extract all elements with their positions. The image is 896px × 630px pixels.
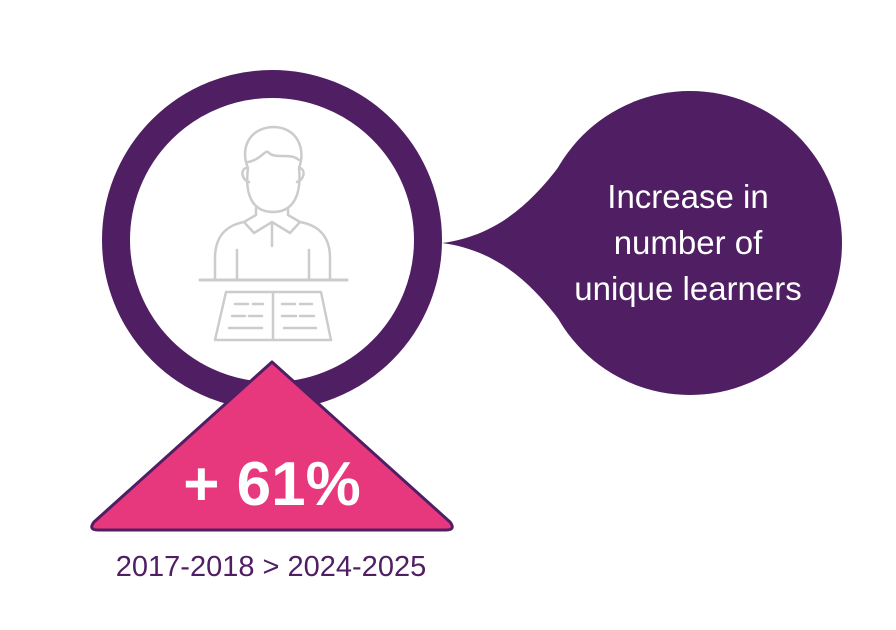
bubble text: Increase in	[607, 178, 769, 215]
date range: 2017-2018 > 2024-2025	[116, 551, 426, 583]
bubble text line 3: unique learners	[574, 270, 802, 307]
triangle: percentage badge	[92, 362, 452, 530]
percentage value: + 61%	[183, 450, 361, 519]
icon: learner reading	[200, 127, 347, 340]
bubble text line 2: number of	[614, 224, 763, 261]
speech bubble: right	[442, 91, 842, 395]
ring circle	[116, 84, 428, 396]
